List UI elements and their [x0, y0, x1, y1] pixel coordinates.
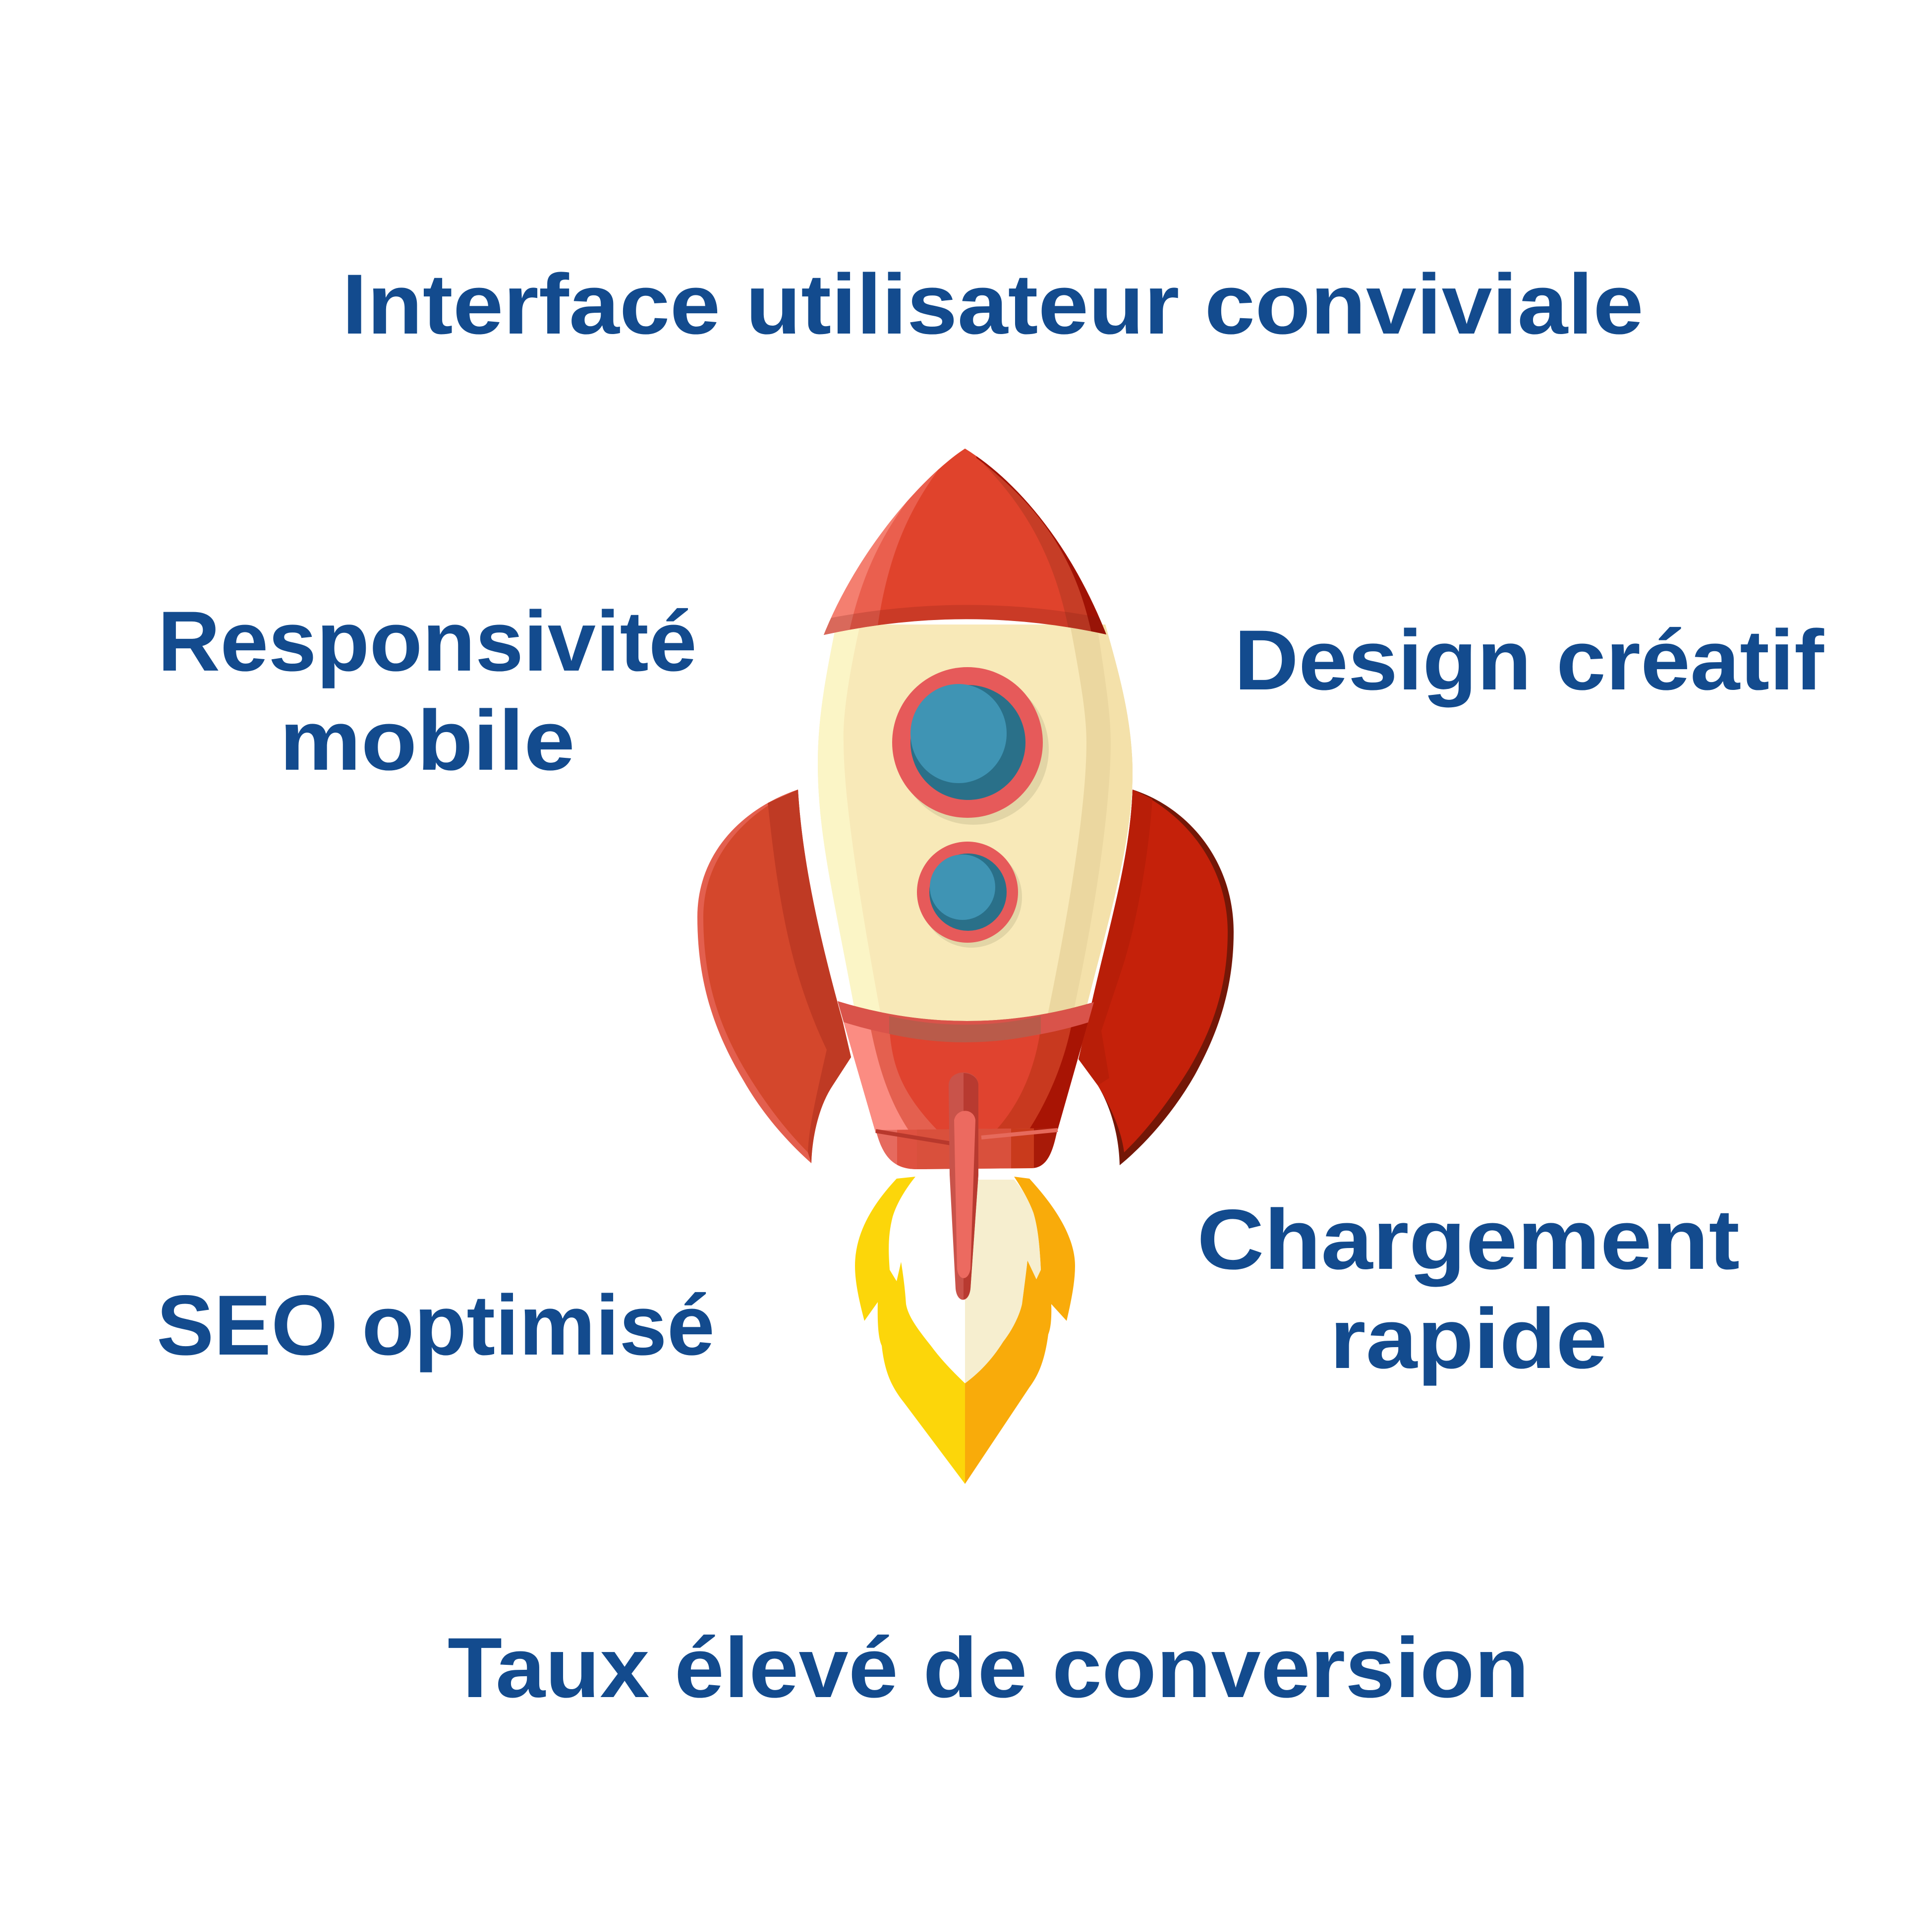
engine skirt — [833, 996, 1100, 1175]
label: SEO optimisé: SEO optimisé — [157, 1278, 715, 1373]
label: Taux élevé de conversion: Taux élevé de conversion — [448, 1620, 1529, 1715]
label: Responsivité mobile — [158, 594, 697, 788]
illustration: rocket — [697, 444, 1234, 1484]
nose cone — [824, 449, 1106, 635]
body — [813, 444, 1140, 1036]
label: Design créatif: Design créatif — [1234, 613, 1824, 708]
large window — [892, 667, 1049, 825]
label: Responsivité mobile: mobile — [280, 693, 575, 788]
label: Responsivité mobile: Responsivité — [158, 594, 697, 689]
label: Chargement rapide: rapide — [1330, 1291, 1607, 1386]
left fin — [697, 790, 851, 1163]
tail stem — [949, 1073, 978, 1300]
flame — [855, 1177, 1075, 1484]
right fin — [1079, 790, 1234, 1165]
label: Chargement rapide: Chargement — [1197, 1192, 1740, 1287]
label: Chargement rapide — [1197, 1192, 1740, 1386]
engine cap — [875, 1128, 1058, 1169]
title: Interface utilisateur conviviale: Interface utilisateur conviviale — [342, 257, 1644, 352]
small window — [917, 842, 1022, 948]
